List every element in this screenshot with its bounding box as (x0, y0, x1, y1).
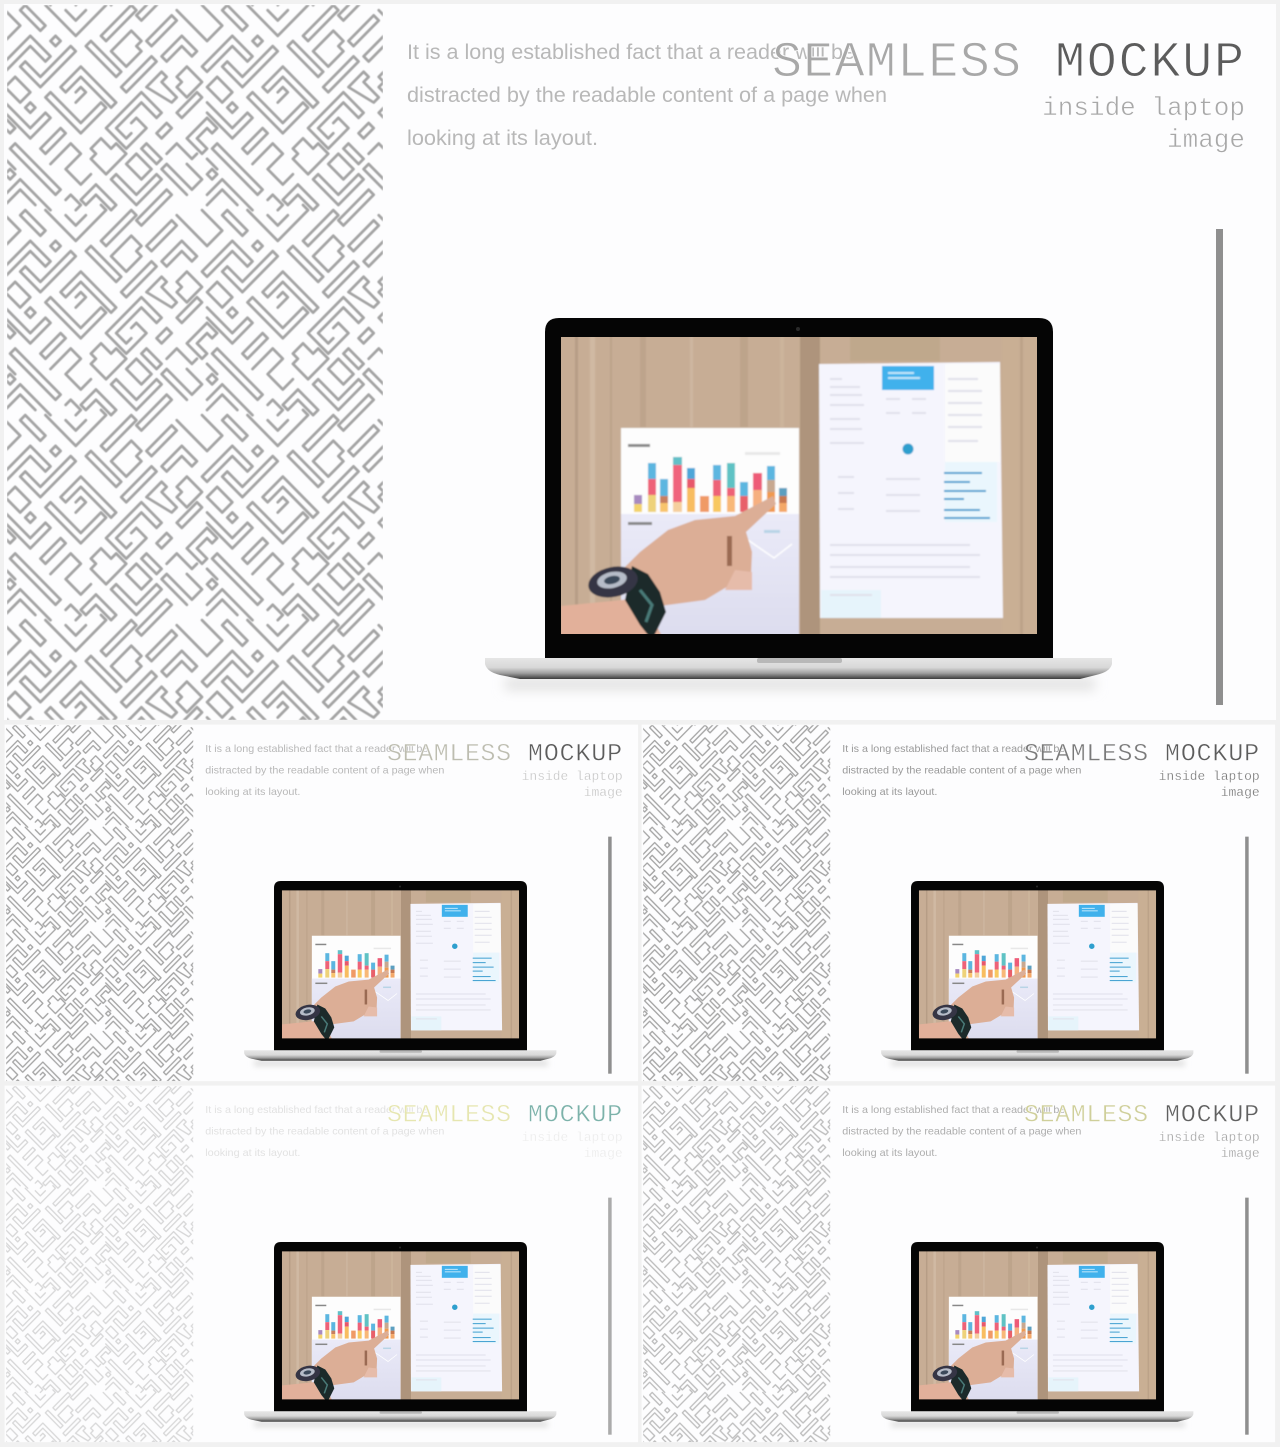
laptop screen photo (555, 331, 1043, 640)
body text paragraph: looking at its layout. (842, 787, 937, 798)
vertical grey bar (1245, 1198, 1249, 1435)
body text paragraph: distracted by the readable content of a page when (842, 1126, 1082, 1137)
subtitle: inside laptop image: image (1167, 125, 1245, 155)
slide panel (5, 1086, 638, 1442)
vertical grey bar (608, 837, 612, 1074)
body text paragraph: It is a long established fact that a reader will be (205, 744, 429, 755)
laptop mockup (244, 1242, 556, 1427)
body text paragraph: It is a long established fact that a reader will be (842, 1105, 1066, 1116)
subtitle: inside laptop image: image (584, 785, 623, 800)
subtitle: inside laptop image: inside laptop (522, 1130, 623, 1145)
body text paragraph: looking at its layout. (407, 127, 598, 150)
title: SEAMLESS MOCKUP: MOCKUP (528, 740, 622, 768)
title: SEAMLESS MOCKUP: MOCKUP (528, 1101, 622, 1129)
body text paragraph: It is a long established fact that a reader will be (407, 41, 855, 64)
maze pattern panel (6, 725, 193, 1081)
pointing hand (561, 496, 776, 640)
subtitle: inside laptop image: image (1221, 785, 1260, 800)
maze pattern panel, lighter (643, 1086, 830, 1442)
laptop hinge notch (757, 658, 842, 663)
maze pattern panel (643, 725, 830, 1081)
slide 1: large main slide (4, 4, 1276, 720)
left paper with chart (621, 428, 799, 640)
body text paragraph: It is a long established fact that a reader will be (842, 744, 1066, 755)
subtitle: inside laptop image: inside laptop (1159, 1130, 1260, 1145)
vertical grey bar (1216, 229, 1223, 705)
stacked bar chart (634, 457, 787, 512)
title: SEAMLESS MOCKUP: SEAMLESS (1024, 1101, 1148, 1129)
slide 3: top-right small slide (642, 725, 1275, 1081)
title: SEAMLESS MOCKUP: MOCKUP (1165, 740, 1259, 768)
body text paragraph: distracted by the readable content of a page when (205, 765, 445, 776)
subtitle: inside laptop image: image (1221, 1146, 1260, 1161)
laptop base (485, 658, 1112, 679)
right paper resume (819, 362, 1003, 618)
vertical grey bar (608, 1198, 612, 1435)
laptop mockup (881, 1242, 1193, 1427)
title: SEAMLESS MOCKUP: SEAMLESS (387, 740, 511, 768)
laptop mockup (485, 318, 1112, 690)
title: SEAMLESS MOCKUP: SEAMLESS (387, 1101, 511, 1129)
title: SEAMLESS MOCKUP: MOCKUP (1055, 35, 1244, 92)
slide panel (642, 1086, 1275, 1442)
maze pattern panel, faded (6, 1086, 193, 1442)
title: SEAMLESS MOCKUP: SEAMLESS (772, 35, 1021, 92)
subtitle: inside laptop image: image (584, 1146, 623, 1161)
slide 2: top-left small slide (5, 725, 638, 1081)
slide panel (642, 725, 1275, 1081)
laptop mockup (244, 881, 556, 1066)
laptop mockup (881, 881, 1193, 1066)
body text paragraph, faded: distracted by the readable content of a page when (205, 1126, 445, 1137)
subtitle: inside laptop image: inside laptop (1159, 769, 1260, 784)
slide 5: bottom-right small slide (642, 1086, 1275, 1442)
body text paragraph: distracted by the readable content of a page when (407, 84, 887, 107)
subtitle: inside laptop image: inside laptop (522, 769, 623, 784)
title: SEAMLESS MOCKUP: MOCKUP (1165, 1101, 1259, 1129)
laptop shadow (505, 678, 1095, 690)
webcam (796, 327, 800, 331)
body text paragraph: distracted by the readable content of a page when (842, 765, 1082, 776)
slide panel (5, 725, 638, 1081)
wood desk (555, 331, 1043, 640)
wristwatch (585, 562, 666, 640)
small line chart on paper (748, 540, 792, 558)
body text paragraph, faded: looking at its layout. (205, 1148, 300, 1159)
subtitle: inside laptop image: inside laptop (1042, 93, 1245, 123)
body text paragraph, faded: It is a long established fact that a reader will be (205, 1105, 429, 1116)
maze pattern panel (7, 5, 383, 720)
laptop black bezel (545, 318, 1053, 658)
body text paragraph: looking at its layout. (205, 787, 300, 798)
slide 4: bottom-left small slide, faded (5, 1086, 638, 1442)
title: SEAMLESS MOCKUP: SEAMLESS (1024, 740, 1148, 768)
slide panel (4, 4, 1276, 720)
vertical grey bar (1245, 837, 1249, 1074)
body text paragraph: looking at its layout. (842, 1148, 937, 1159)
